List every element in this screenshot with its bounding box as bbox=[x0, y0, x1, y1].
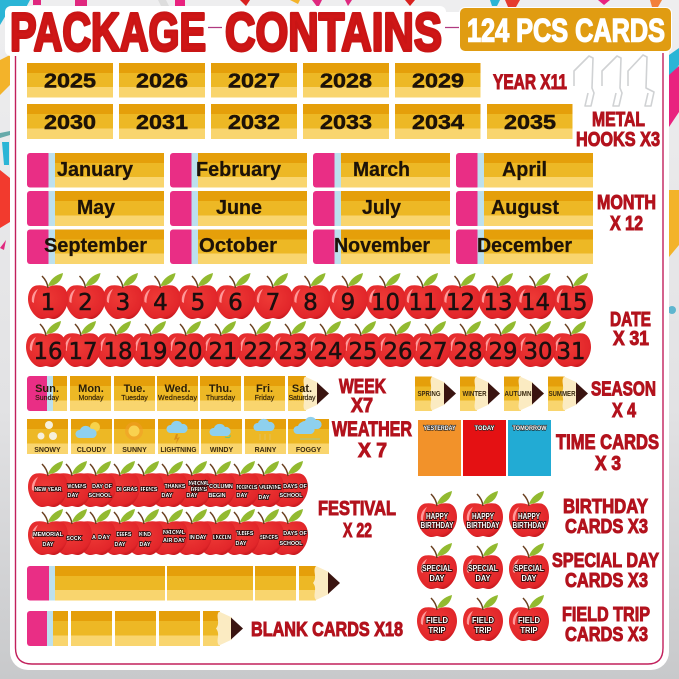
date apples row 1: 9 bbox=[341, 290, 355, 316]
season pencil cards: SPRING bbox=[418, 391, 441, 398]
festival apples row 1: WOMEN'S bbox=[68, 484, 87, 490]
label: season x 4 bbox=[591, 378, 656, 422]
date apples row 1: 8 bbox=[303, 290, 318, 316]
festival apples row 1: COLUMN bbox=[209, 484, 233, 490]
label: metal hooks x3: HOOKS X3 bbox=[576, 128, 660, 151]
week pencil cards: Wednesday bbox=[158, 395, 198, 402]
year cards: 2030 bbox=[44, 111, 96, 134]
month cards: February bbox=[196, 159, 282, 181]
festival apples row 1: BEGIN bbox=[208, 493, 226, 499]
festival apples row 1: DAY bbox=[68, 493, 79, 499]
festival apples row 2: SCHOOL bbox=[279, 541, 303, 547]
label: month x 12: MONTH bbox=[597, 191, 656, 214]
field trip apples: TRIP bbox=[428, 626, 446, 635]
special day apples: SPECIAL bbox=[422, 564, 452, 573]
festival apples row 1: FRIENDS bbox=[140, 487, 158, 493]
label: weather x 7 bbox=[332, 417, 412, 462]
festival apples row 2: MEMORIAL bbox=[33, 532, 64, 538]
date apples row 2: 26 bbox=[384, 339, 412, 365]
label: festival x 22: X 22 bbox=[343, 519, 372, 542]
label: week x7 bbox=[339, 375, 386, 417]
special day apples: DAY bbox=[522, 574, 537, 583]
month cards: June bbox=[216, 197, 262, 219]
time cards: TOMORROW bbox=[512, 425, 547, 432]
season pencil cards: AUTUMN bbox=[504, 391, 532, 398]
year cards: 2028 bbox=[320, 70, 372, 92]
field trip apples: FIELD bbox=[472, 616, 494, 625]
year cards bbox=[27, 63, 572, 139]
festival apples row 1: VALENTINE bbox=[259, 485, 281, 491]
month cards bbox=[27, 153, 593, 264]
festival apples row 2: A DAY bbox=[92, 535, 110, 541]
birthday apples: HAPPY bbox=[518, 512, 541, 521]
month cards: March bbox=[353, 159, 410, 181]
weather cards: CLOUDY bbox=[77, 447, 107, 454]
festival apples row 2: IN DAY bbox=[190, 535, 207, 541]
weather cards bbox=[27, 417, 329, 454]
special day apples: DAY bbox=[430, 574, 445, 583]
date apples row 2: 21 bbox=[208, 339, 238, 365]
label: metal hooks x3: METAL bbox=[592, 108, 645, 131]
date apples row 1: 2 bbox=[78, 290, 93, 316]
season pencil cards: SUMMER bbox=[548, 391, 576, 398]
date apples row 2: 17 bbox=[68, 339, 98, 365]
date apples row 2: 31 bbox=[556, 339, 586, 365]
label: week x7: X7 bbox=[351, 394, 373, 417]
label: date x 31: DATE bbox=[610, 308, 651, 331]
date apples row 2: 30 bbox=[524, 339, 552, 365]
special day apples: DAY bbox=[476, 574, 491, 583]
week pencil cards: Monday bbox=[79, 395, 104, 402]
week pencil cards bbox=[27, 376, 329, 411]
special day apples: SPECIAL bbox=[468, 564, 498, 573]
icon: metal hooks bbox=[574, 55, 654, 106]
festival apples row 2: SOCK bbox=[66, 536, 82, 542]
label: special day cards x3 bbox=[552, 549, 659, 592]
week pencil cards: Thursday bbox=[206, 395, 236, 402]
weather cards: SNOWY bbox=[34, 447, 61, 454]
label: birthday cards x3 bbox=[563, 495, 648, 538]
festival apples row 1: THANKS bbox=[164, 484, 186, 490]
festival apples row 2: DAY bbox=[115, 542, 126, 548]
label: month x 12 bbox=[597, 191, 656, 235]
date apples row 2: 24 bbox=[314, 339, 342, 365]
icon: sunny bbox=[125, 422, 143, 440]
week pencil cards: Fri. bbox=[256, 383, 273, 395]
label: year x11: YEAR X11 bbox=[493, 70, 567, 94]
blank pencil card 2 bbox=[27, 611, 243, 646]
festival apples row 1: DAY OF bbox=[92, 484, 113, 490]
month cards: May bbox=[77, 197, 116, 219]
label: birthday cards x3: CARDS X3 bbox=[565, 515, 648, 538]
label: field trip cards x3: CARDS X3 bbox=[565, 623, 648, 646]
festival apples row 1: DAY bbox=[187, 493, 198, 499]
weather cards: SUNNY bbox=[122, 447, 147, 454]
weather cards: FOGGY bbox=[296, 447, 321, 454]
festival apples row 2: TUBER'S bbox=[236, 531, 254, 537]
year cards: 2027 bbox=[228, 70, 280, 92]
festival apples row 2: DAY bbox=[43, 542, 54, 548]
week pencil cards: Saturday bbox=[288, 395, 316, 402]
date apples row 2 bbox=[26, 321, 591, 367]
date apples row 2: 20 bbox=[174, 339, 202, 365]
year cards: 2025 bbox=[44, 70, 96, 92]
festival apples row 1: DAYS OF bbox=[283, 484, 307, 490]
label: date x 31: X 31 bbox=[613, 327, 649, 350]
festival apples row 2: DAY bbox=[236, 541, 247, 547]
month cards: November bbox=[334, 235, 430, 257]
year cards: 2034 bbox=[412, 111, 465, 134]
year cards: 2031 bbox=[136, 111, 188, 134]
label: time cards x 3: X 3 bbox=[595, 452, 621, 475]
festival apples row 2: DAY bbox=[140, 542, 151, 548]
birthday apples: HAPPY bbox=[472, 512, 495, 521]
birthday apples: BIRTHDAY bbox=[466, 521, 500, 530]
week pencil cards: Tuesday bbox=[121, 395, 148, 402]
label: birthday cards x3: BIRTHDAY bbox=[563, 495, 648, 518]
week pencil cards: Wed. bbox=[164, 383, 191, 395]
time cards: YESTERDAY bbox=[424, 425, 456, 432]
date apples row 1: 14 bbox=[521, 290, 550, 316]
label: field trip cards x3 bbox=[562, 603, 650, 646]
festival apples row 1: NEW YEAR bbox=[34, 487, 62, 493]
date apples row 1: 15 bbox=[558, 290, 588, 316]
blank pencil card 1 bbox=[27, 566, 340, 600]
birthday apples: HAPPY bbox=[426, 512, 449, 521]
month cards: August bbox=[491, 197, 559, 219]
year cards: 2029 bbox=[412, 70, 464, 92]
festival apples row 1: INDIGENOUS bbox=[236, 485, 258, 491]
date apples row 2: 27 bbox=[418, 339, 448, 365]
festival apples row 2: AIR DAY bbox=[163, 538, 185, 544]
date apples row 2: 18 bbox=[104, 339, 132, 365]
weather cards: LIGHTNING bbox=[160, 447, 197, 454]
season pencil cards: WINTER bbox=[462, 391, 486, 398]
label: week x7: WEEK bbox=[339, 375, 386, 398]
festival apples row 2: KIND bbox=[139, 532, 151, 538]
festival apples row 2 bbox=[28, 509, 308, 555]
date apples row 1 bbox=[28, 273, 593, 319]
icon: rainy bbox=[253, 419, 275, 440]
icon: lightning bbox=[166, 421, 188, 444]
month cards: October bbox=[199, 235, 277, 257]
icon: snowflakes bbox=[38, 421, 57, 440]
festival apples row 1: SCHOOL bbox=[279, 493, 303, 499]
icon: cloudy bbox=[75, 422, 100, 438]
date apples row 1: 4 bbox=[153, 290, 168, 316]
week pencil cards: Tue. bbox=[124, 383, 145, 395]
weather cards: RAINY bbox=[255, 447, 277, 454]
date apples row 2: 29 bbox=[488, 339, 518, 365]
date apples row 2: 23 bbox=[278, 339, 308, 365]
date apples row 2: 22 bbox=[244, 339, 272, 365]
time cards: TODAY bbox=[474, 425, 495, 432]
label: weather x 7: X 7 bbox=[358, 439, 387, 462]
month cards: April bbox=[502, 159, 547, 181]
label: date x 31 bbox=[610, 308, 651, 350]
field trip apples: FIELD bbox=[426, 616, 448, 625]
date apples row 2: 28 bbox=[454, 339, 482, 365]
field trip apples: TRIP bbox=[520, 626, 538, 635]
label: blank cards x18: BLANK CARDS X18 bbox=[251, 618, 403, 641]
title: package contains: PACKAGE bbox=[10, 2, 206, 62]
date apples row 1: 7 bbox=[266, 290, 280, 316]
date apples row 1: 1 bbox=[41, 290, 55, 316]
title: package contains: CONTAINS bbox=[225, 2, 442, 62]
date apples row 1: 3 bbox=[116, 290, 130, 316]
year cards: 2026 bbox=[136, 70, 188, 92]
label: festival x 22: FESTIVAL bbox=[318, 497, 396, 520]
festival apples row 2: DEER'S bbox=[116, 532, 132, 538]
date apples row 1: 5 bbox=[191, 290, 205, 316]
field trip apples bbox=[417, 595, 549, 641]
weather cards: WINDY bbox=[210, 447, 233, 454]
week pencil cards: Sun. bbox=[35, 383, 59, 395]
field trip apples: FIELD bbox=[518, 616, 540, 625]
label: time cards x 3 bbox=[556, 431, 659, 475]
festival apples row 2: NATIONAL bbox=[163, 530, 186, 536]
week pencil cards: Sunday bbox=[35, 395, 59, 402]
label: weather x 7: WEATHER bbox=[332, 417, 412, 441]
month cards: July bbox=[362, 197, 402, 219]
date apples row 1: 12 bbox=[446, 290, 475, 316]
date apples row 2: 19 bbox=[138, 339, 168, 365]
label: season x 4: SEASON bbox=[591, 378, 656, 400]
time cards bbox=[418, 420, 551, 476]
month cards: September bbox=[44, 235, 147, 257]
special day apples: SPECIAL bbox=[514, 564, 544, 573]
month cards: December bbox=[477, 235, 572, 257]
date apples row 2: 25 bbox=[348, 339, 378, 365]
birthday apples: BIRTHDAY bbox=[512, 521, 546, 530]
festival apples row 2: SENIORS bbox=[260, 535, 278, 541]
festival apples row 1: DAY bbox=[259, 495, 270, 501]
festival apples row 1: PARENTS' bbox=[191, 487, 208, 493]
date apples row 2: 16 bbox=[34, 339, 62, 365]
festival apples row 2: LINCOLN bbox=[213, 535, 231, 541]
field trip apples: TRIP bbox=[474, 626, 492, 635]
date apples row 1: 6 bbox=[228, 290, 243, 316]
year cards: 2033 bbox=[320, 111, 372, 134]
week pencil cards: Sat. bbox=[292, 383, 312, 395]
birthday apples: BIRTHDAY bbox=[420, 521, 454, 530]
festival apples row 1: DAY bbox=[237, 493, 248, 499]
date apples row 1: 11 bbox=[408, 290, 438, 316]
icon: windy bbox=[209, 424, 231, 438]
icon: foggy bbox=[293, 417, 322, 439]
title: package contains bbox=[5, 2, 459, 62]
label: special day cards x3: CARDS X3 bbox=[565, 569, 648, 592]
label: season x 4: X 4 bbox=[612, 399, 636, 422]
festival apples row 1: NATIONAL bbox=[188, 481, 210, 487]
week pencil cards: Friday bbox=[255, 395, 275, 402]
season pencil cards bbox=[415, 376, 588, 411]
label: festival x 22 bbox=[318, 497, 396, 542]
label: metal hooks x3 bbox=[576, 108, 660, 151]
label: field trip cards x3: FIELD TRIP bbox=[562, 603, 650, 626]
year cards: 2032 bbox=[228, 111, 280, 134]
week pencil cards: Mon. bbox=[78, 383, 104, 395]
festival apples row 1: SCHOOL bbox=[88, 493, 112, 499]
date apples row 1: 10 bbox=[371, 290, 400, 316]
festival apples row 2: DAYS OF bbox=[283, 531, 307, 537]
label: month x 12: X 12 bbox=[610, 212, 643, 235]
festival apples row 1: DAY bbox=[162, 493, 173, 499]
festival apples row 1 bbox=[28, 461, 308, 507]
date apples row 1: 13 bbox=[484, 290, 512, 316]
week pencil cards: Thu. bbox=[209, 383, 232, 395]
festival apples row 1: DI GRAS bbox=[116, 487, 138, 493]
year cards: 2035 bbox=[504, 111, 556, 134]
month cards: January bbox=[57, 159, 134, 181]
special day apples bbox=[417, 543, 549, 589]
birthday apples bbox=[417, 491, 549, 537]
